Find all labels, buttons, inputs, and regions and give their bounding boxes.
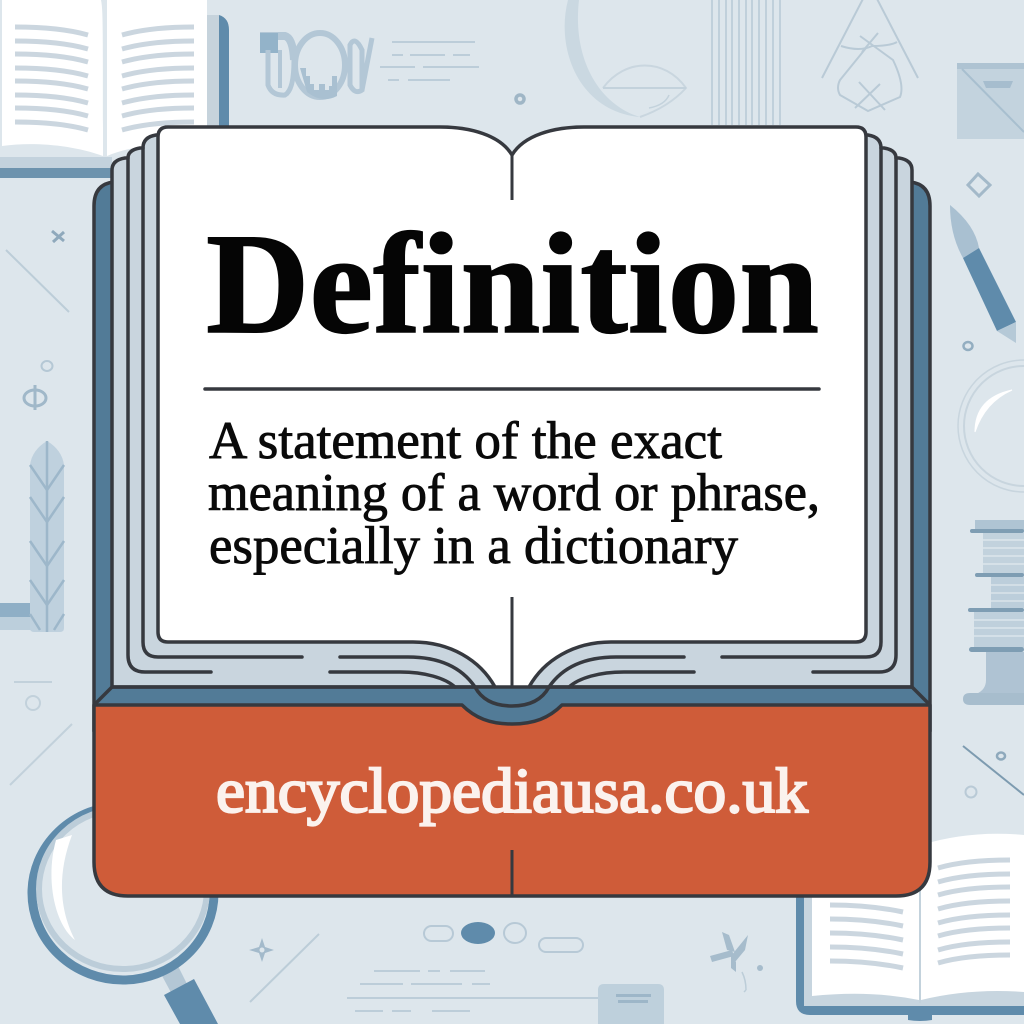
text block: definition: especially in a dictionary xyxy=(209,517,738,575)
icon: fountain pen xyxy=(950,205,1016,343)
icon: open book bottom right xyxy=(796,834,1024,1021)
decorative slash bottom xyxy=(250,934,319,1002)
text block: definition: meaning of a word or phrase, xyxy=(208,464,820,522)
spine line cover xyxy=(510,850,514,896)
decorative marks lower right xyxy=(963,746,1024,798)
icon: magnifying glass xyxy=(32,806,218,1024)
decorative marks upper left xyxy=(6,231,69,371)
icon: diamond outline xyxy=(968,174,990,196)
decorative text lines top xyxy=(380,42,479,80)
icon: triangle geometric top xyxy=(822,0,918,111)
title: Definition xyxy=(206,205,819,364)
icon: phi symbol xyxy=(24,385,46,410)
icon: small box bottom xyxy=(598,984,664,1024)
panel: main open book xyxy=(94,127,930,896)
website label: encyclopediausa.co.uk xyxy=(216,755,808,826)
panel: red lower cover xyxy=(94,705,930,896)
icon: pills and dots bottom xyxy=(424,922,583,952)
spine groove xyxy=(94,687,930,706)
icon: lens circle right xyxy=(958,360,1024,492)
decorative vertical lines top xyxy=(712,0,780,125)
book blue cover xyxy=(94,182,930,730)
page stack xyxy=(112,135,912,687)
icon: feather leaf xyxy=(0,441,64,632)
decorative text lines bottom xyxy=(347,971,600,1011)
icon: small ring top xyxy=(516,95,524,103)
spine line top xyxy=(510,155,514,200)
decorative marks lower left xyxy=(10,682,72,785)
white page xyxy=(158,127,866,687)
icon: abstract glyph cluster top xyxy=(260,33,372,99)
icon: open book top left xyxy=(0,0,229,178)
divider rule xyxy=(205,387,819,391)
icon: crescent and lens top xyxy=(565,0,686,117)
icon: envelope right xyxy=(957,63,1024,139)
spine line bottom xyxy=(510,597,514,687)
icon: propeller bottom xyxy=(710,932,763,992)
text block: definition: A statement of the exact xyxy=(209,412,722,470)
icon: small ring right xyxy=(964,342,972,350)
text block: definition xyxy=(208,412,820,575)
icon: stack of books right xyxy=(963,520,1024,705)
icon: sparkle bottom xyxy=(249,938,274,962)
